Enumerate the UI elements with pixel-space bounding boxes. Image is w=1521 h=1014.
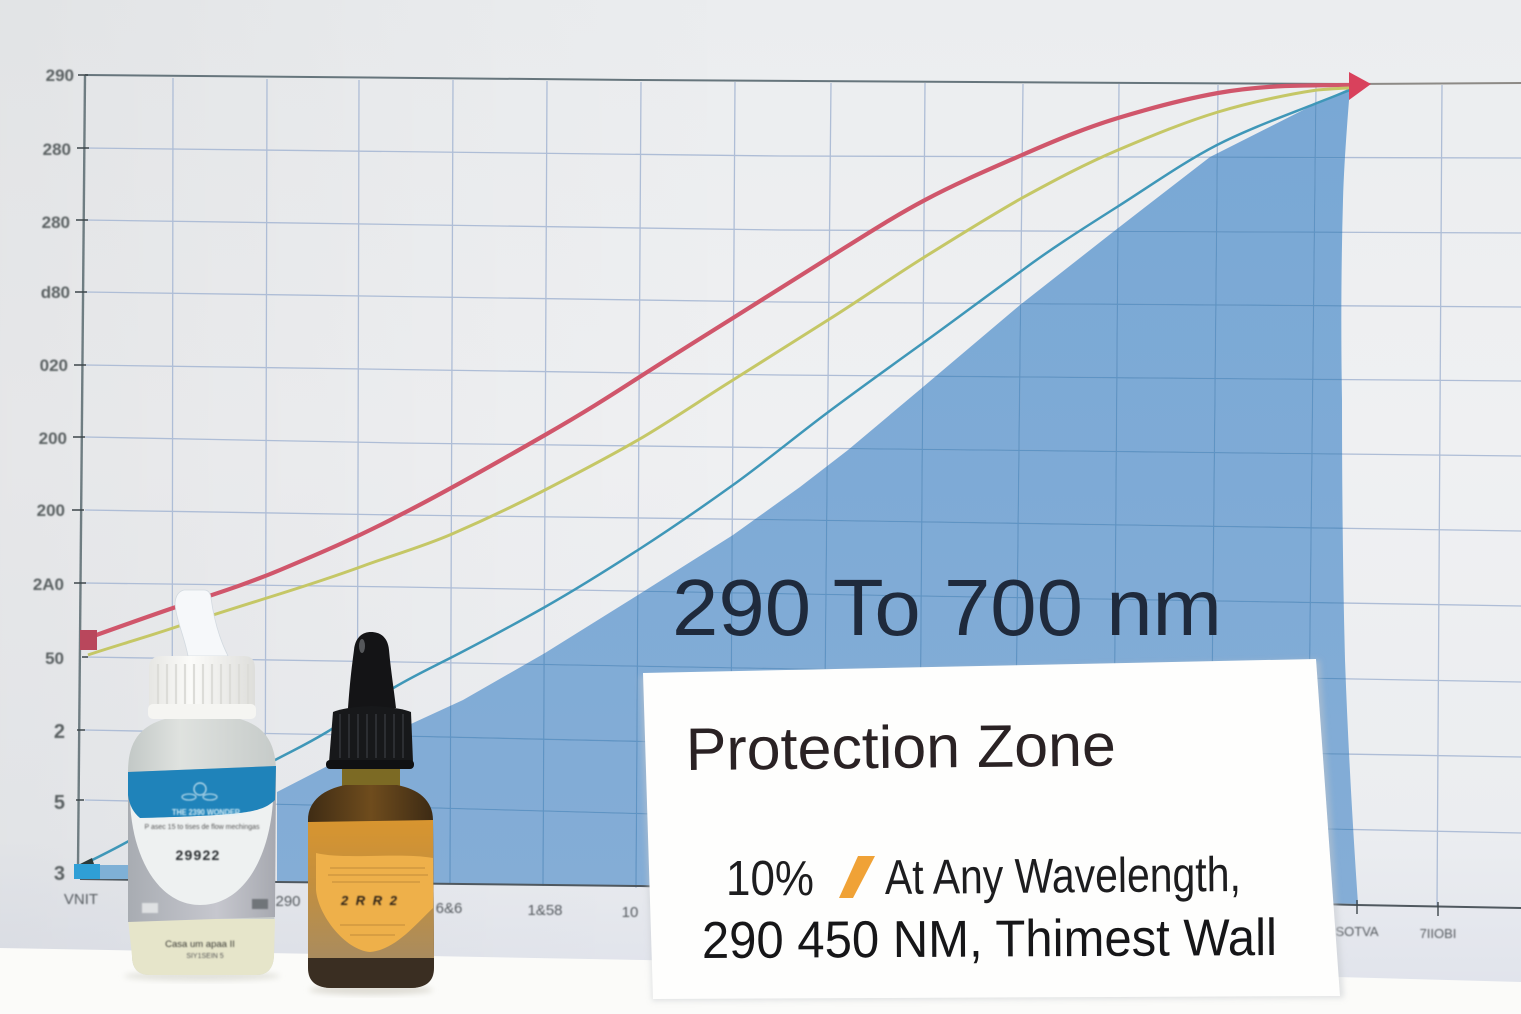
clear serum bottle bbox=[124, 590, 280, 981]
card surface bbox=[643, 659, 1340, 999]
bottle label text: 29922 bbox=[176, 847, 220, 863]
dropper bottle shadow bbox=[309, 985, 433, 995]
white label oval bbox=[130, 800, 273, 905]
bottle label text: SIY1SEIN 5 bbox=[186, 953, 224, 960]
blue start marker bbox=[74, 858, 130, 879]
wavelength text: At Any Wavelength, bbox=[885, 848, 1241, 905]
red curve bbox=[88, 85, 1350, 638]
y axis labels: 020 bbox=[40, 356, 68, 375]
card shadow bbox=[640, 660, 1344, 1001]
amber label text: 2 R R 2 bbox=[340, 893, 399, 908]
bottle label text: P asec 15 to tises de flow mechingas bbox=[144, 824, 260, 831]
blue label band bbox=[128, 766, 276, 818]
silver label bbox=[128, 766, 276, 922]
grid lines bbox=[85, 78, 1521, 906]
rubber bulb bbox=[348, 632, 396, 708]
x axis labels: SOTVA bbox=[1335, 924, 1379, 939]
y axis labels: 50 bbox=[45, 649, 64, 668]
axes bbox=[72, 75, 1521, 916]
bottle cap bbox=[148, 656, 256, 719]
protection zone card bbox=[640, 659, 1344, 1001]
y axis labels bbox=[33, 66, 74, 885]
y axis labels: d80 bbox=[41, 283, 70, 302]
bottle neck bbox=[342, 769, 400, 791]
x axis labels bbox=[64, 891, 1456, 941]
percentage: 10% bbox=[726, 852, 814, 906]
teal curve bbox=[80, 90, 1350, 866]
x axis labels: 6&6 bbox=[436, 900, 462, 917]
bottle shadow bbox=[124, 971, 280, 981]
x axis labels: VNIT bbox=[64, 891, 98, 908]
dark sediment bbox=[308, 958, 434, 988]
range text: 290 450 NM, Thimest Wall bbox=[702, 909, 1277, 970]
y axis labels: 280 bbox=[43, 140, 71, 159]
y axis labels: 280 bbox=[42, 213, 70, 232]
orange slash bbox=[839, 856, 875, 898]
headline range: 290 To 700 nm bbox=[672, 563, 1222, 652]
bottle nozzle bbox=[175, 590, 228, 656]
y axis labels: 290 bbox=[46, 66, 74, 85]
amber label inner shape bbox=[316, 853, 433, 952]
amber bottle body bbox=[308, 785, 434, 988]
dropper cap bbox=[326, 706, 414, 769]
y axis labels: 5 bbox=[54, 792, 65, 814]
y axis labels: 3 bbox=[54, 863, 65, 885]
y axis labels: 2 bbox=[54, 721, 65, 743]
x axis labels: 10 bbox=[622, 904, 638, 921]
bottle label text: THE 2390 WONDER bbox=[172, 808, 240, 817]
y axis labels: 200 bbox=[39, 429, 67, 448]
card heading: Protection Zone bbox=[685, 712, 1116, 783]
protection zone filled area bbox=[277, 88, 1358, 904]
bulb highlight bbox=[359, 639, 365, 653]
y axis labels: 2A0 bbox=[33, 575, 64, 594]
x axis labels: 1&58 bbox=[527, 902, 563, 919]
bottle label text: Casa um apaa II bbox=[165, 939, 235, 950]
x axis labels: 7IIOBI bbox=[1420, 926, 1456, 941]
milky liquid base bbox=[128, 919, 275, 975]
amber label bbox=[308, 820, 434, 960]
y axis labels: 200 bbox=[37, 501, 65, 520]
bottle body bbox=[128, 719, 276, 975]
bottle label text bbox=[142, 783, 268, 960]
amber dropper bottle bbox=[308, 632, 434, 995]
label fine print bbox=[328, 868, 428, 935]
red arrowhead bbox=[1349, 72, 1371, 100]
x axis labels: 290 bbox=[275, 893, 301, 910]
olive curve bbox=[88, 88, 1350, 655]
red start marker bbox=[80, 630, 97, 650]
